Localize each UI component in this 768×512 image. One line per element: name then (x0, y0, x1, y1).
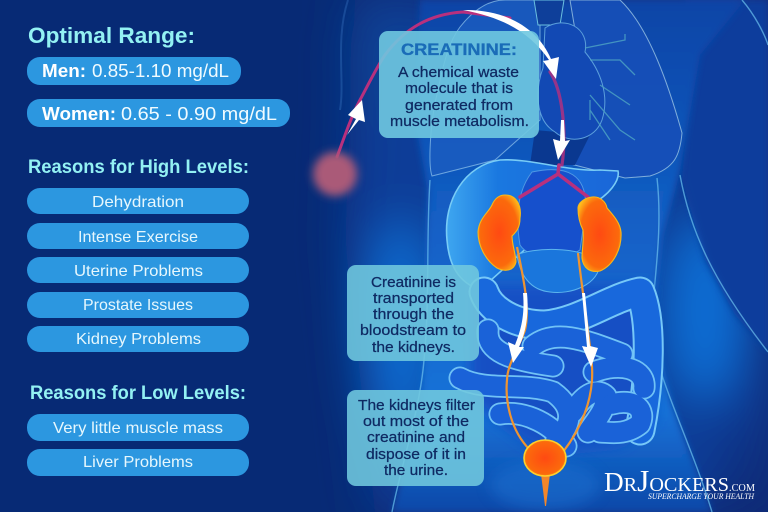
ureters (507, 247, 592, 452)
pill: men range: 0.85-1.10 mg/dL (92, 61, 229, 81)
heart (538, 23, 605, 139)
logo: DrJockers.com: DRJOCKERS (604, 463, 729, 498)
pill: women range: Women: (42, 104, 116, 124)
callout heading: CREATININE: (401, 40, 517, 59)
intestine bed (470, 285, 655, 450)
blood path: pink line (337, 12, 588, 197)
list: high level reasons: Prostate Issues (83, 297, 193, 314)
pill: women range (27, 99, 290, 127)
callout description: molecule that is (405, 81, 513, 97)
heading: reasons for low levels: Reasons for Low Levels: (30, 383, 246, 404)
illustration: human torso (340, 0, 768, 512)
pill: men range (27, 57, 241, 85)
arrow: top arc (463, 10, 559, 79)
filter text: out most of the (363, 414, 469, 430)
callout description: A chemical waste (398, 65, 519, 81)
list: low level reasons: Liver Problems (83, 454, 193, 471)
list: high level reasons: Dehydration (92, 194, 184, 211)
bladder (524, 440, 566, 476)
heading: optimal range: Optimal Range: (28, 23, 195, 48)
logo: DrJockers.com: .COM (729, 483, 755, 494)
logo: DrJockers.com: SUPERCHARGE YOUR HEALTH (648, 492, 755, 501)
left arm edge (340, 0, 348, 110)
callout description: generated from (405, 98, 513, 114)
callout description (390, 65, 529, 130)
transport text: through the (373, 307, 454, 323)
liver and stomach (447, 160, 618, 293)
filter text: The kidneys filter (358, 398, 475, 414)
right arm (682, 0, 768, 352)
arm and torso edge lines (392, 0, 768, 512)
mediastinum (530, 130, 590, 165)
body glow (345, 0, 768, 512)
muscle source glow (313, 152, 357, 196)
list: high level reasons: Intense Exercise (78, 229, 198, 246)
arrow: left ureter (508, 293, 528, 363)
transport text: bloodstream to (360, 323, 466, 339)
list: low level reasons: Very little muscle mass (53, 420, 223, 437)
callout description: muscle metabolism. (390, 114, 529, 130)
panel: creatinine callout (379, 31, 539, 138)
heading: reasons for high levels: Reasons for High Levels: (28, 157, 249, 178)
intestines (460, 292, 648, 446)
pelvis glow (490, 461, 600, 509)
panel: filter callout (347, 390, 484, 486)
arrow: right ureter (582, 293, 598, 367)
transport text: the kidneys. (372, 340, 455, 356)
panel: transport callout (347, 265, 479, 361)
transport text (360, 275, 466, 356)
arrow: to fork (553, 120, 570, 160)
urethra (541, 474, 550, 506)
pill: women range: 0.65 - 0.90 mg/dL (121, 104, 277, 124)
kidneys (478, 195, 621, 271)
filter text (358, 398, 475, 479)
list: high level reasons: Uterine Problems (74, 263, 203, 280)
trachea (534, 0, 564, 25)
transport text: Creatinine is (371, 275, 456, 291)
arrow: up to arm (347, 100, 365, 135)
bronchi branches (585, 34, 635, 140)
white arrows (347, 10, 598, 367)
list: high level reasons (27, 188, 249, 352)
torso silhouette (392, 0, 745, 512)
filter text: dispose of it in (366, 447, 466, 463)
lungs (430, 0, 682, 178)
list: low level reasons (27, 414, 249, 476)
filter text: creatinine and (367, 430, 465, 446)
filter text: the urine. (384, 463, 448, 479)
pill: men range: Men: (42, 61, 86, 81)
list: high level reasons: Kidney Problems (76, 331, 201, 348)
transport text: transported (373, 291, 454, 307)
